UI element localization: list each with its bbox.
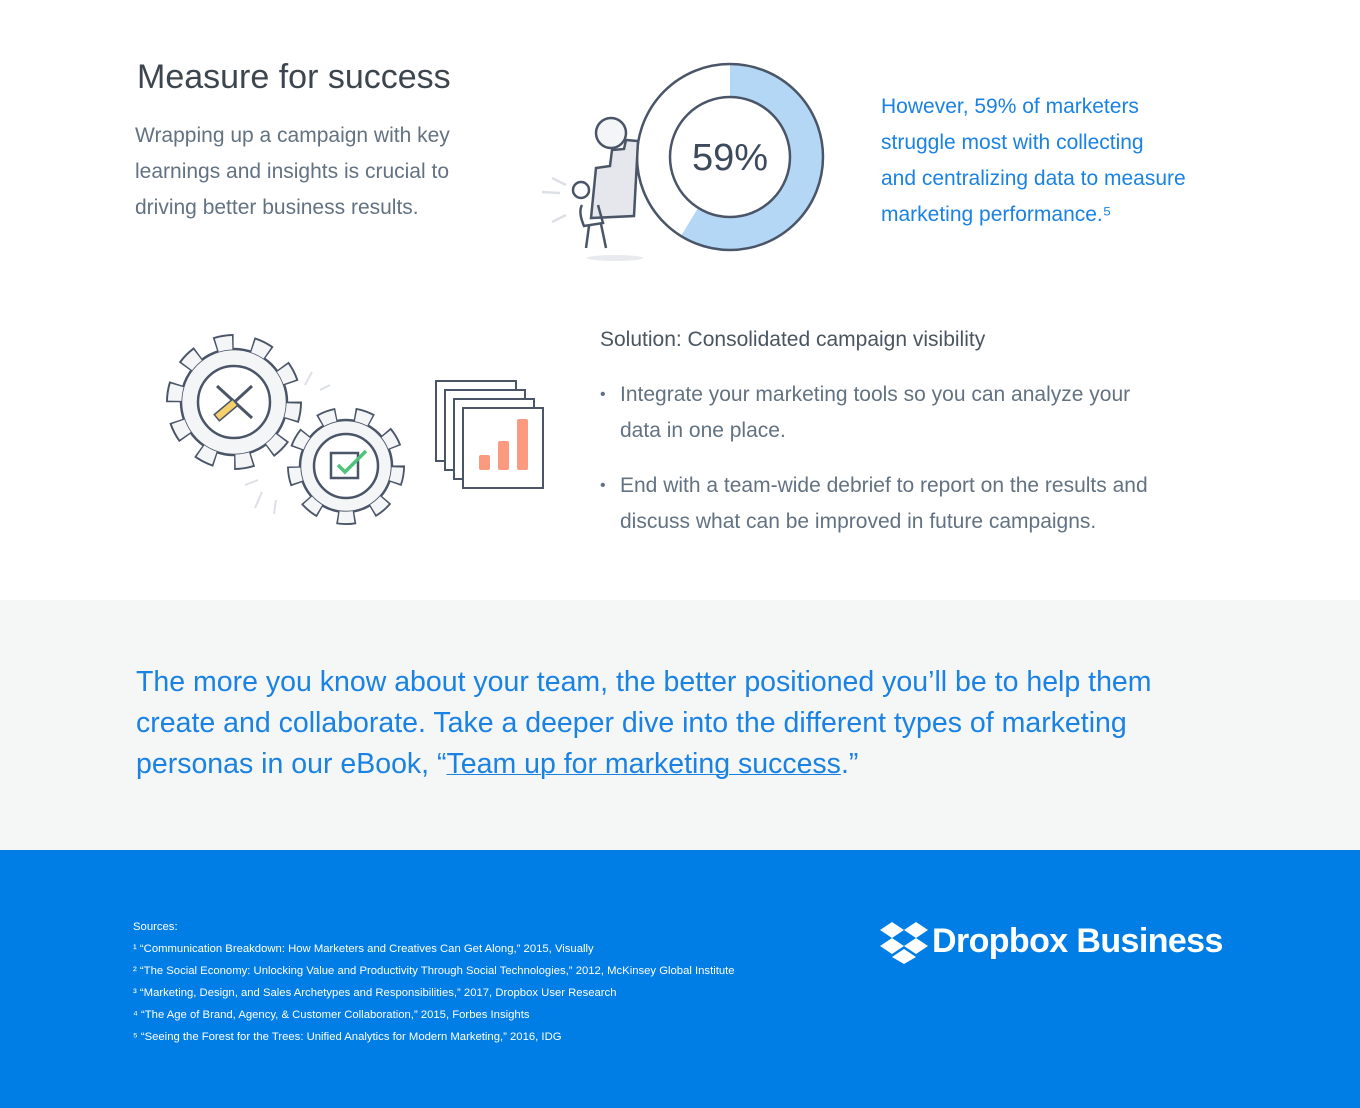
solution bullets xyxy=(600,383,1148,533)
callout band xyxy=(0,600,1360,850)
person carrying chart xyxy=(542,118,638,248)
sources: ⁵ “Seeing the Forest for the Trees: Unified Analytics for Modern Marketing,” 2016, IDG xyxy=(133,1031,562,1043)
stat text: marketing performance.⁵ xyxy=(881,203,1111,226)
sources: Sources: xyxy=(133,921,178,933)
footer xyxy=(0,850,1360,1108)
intro text: Wrapping up a campaign with key learnings and insights is crucial to driving better business results. xyxy=(135,124,450,219)
title: Measure for success xyxy=(137,58,451,96)
donut 59% xyxy=(637,64,823,250)
sources xyxy=(133,921,735,1043)
solution bullets: Integrate your marketing tools so you can analyze your data in one place. xyxy=(620,383,1130,442)
sources: ⁴ “The Age of Brand, Agency, & Customer Collaboration,” 2015, Forbes Insights xyxy=(133,1009,529,1021)
donut 59%: 59% xyxy=(692,137,768,179)
gears and reports illustration xyxy=(166,334,544,525)
solution bullets: End with a team-wide debrief to report on the results and discuss what can be improved in future campaigns. xyxy=(620,474,1148,533)
solution heading: Solution: Consolidated campaign visibility xyxy=(600,328,985,351)
sources: ² “The Social Economy: Unlocking Value and Productivity Through Social Technologies,” 2012, McKinsey Global Institute xyxy=(133,965,735,977)
stat text: However, 59% of marketers xyxy=(881,95,1139,118)
stat text: and centralizing data to measure xyxy=(881,167,1186,190)
logo: Dropbox Business xyxy=(932,922,1223,960)
small gear with check xyxy=(294,414,398,518)
stat text xyxy=(881,95,1186,226)
donut chart illustration xyxy=(542,62,824,261)
callout text: The more you know about your team, the better positioned you’ll be to help them create and collaborate. Take a deeper dive into the different types of marketing personas in our eBook, “Team up for marketing success.” xyxy=(136,666,1152,780)
report stack xyxy=(436,381,543,488)
sources: ³ “Marketing, Design, and Sales Archetypes and Responsibilities,” 2017, Dropbox User Research xyxy=(133,987,616,999)
big gear xyxy=(174,342,294,462)
sources: ¹ “Communication Breakdown: How Marketers and Creatives Can Get Along,” 2015, Visually xyxy=(133,943,594,955)
stat text: struggle most with collecting xyxy=(881,131,1144,154)
